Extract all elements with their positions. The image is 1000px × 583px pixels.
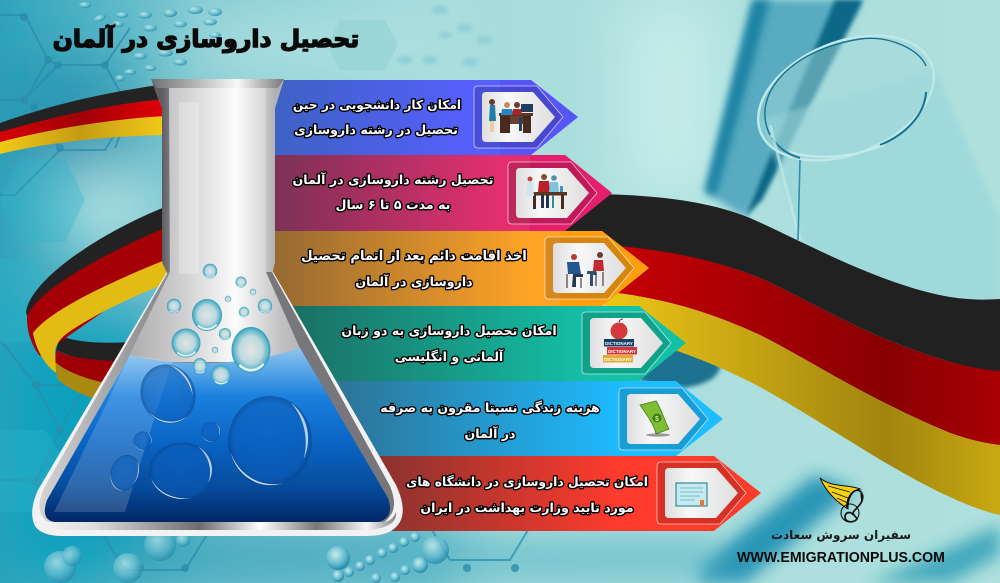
text block [301,249,527,289]
text block: تحصیل در رشته داروسازی [294,122,458,137]
icon: banknote: $ [655,416,659,423]
text block: تحصیل رشته داروسازی در آلمان [292,172,494,187]
icon: two people talking [567,252,604,288]
flask [32,79,403,536]
icon: books and apple [603,319,637,362]
icon: lab team [526,174,567,209]
icon: winged swan [820,478,863,522]
bottom balls [44,529,449,583]
flask neck band [151,79,284,275]
text block: داروسازی در آلمان [355,274,473,289]
text block: آلمانی و انگلیسی [395,349,504,364]
icon: banknote [640,401,670,437]
card [619,388,708,450]
test tube rim [740,12,952,240]
german flag ribbon: right side [555,194,1000,515]
logo: emigration plus [737,478,945,566]
icon: books and apple: DICTIONARY [605,341,633,346]
icon: books and apple: DICTIONARY [608,349,636,354]
card [508,162,597,224]
german flag ribbon: lower left loop [26,205,170,398]
text block: امکان تحصیل داروسازی در دانشگاه های [406,474,648,489]
banner 5: living cost [300,381,723,456]
flask side band [39,272,394,526]
icon: certificate [676,483,707,506]
banner 1: student work [260,80,578,155]
molecule network left [0,15,540,570]
text block: به مدت ۵ تا ۶ سال [336,197,450,212]
card [657,462,746,524]
dark blob behind banner [630,344,720,388]
logo name: سفیران سروش سعادت [771,528,911,543]
test tube back dark streaks [705,0,863,217]
website url: WWW.EMIGRATIONPLUS.COM [737,550,945,566]
text block [380,400,600,441]
banner 2: study length [260,155,612,231]
text block [293,98,461,137]
flask glass [126,88,306,362]
german flag ribbon: top left [0,84,165,154]
text block: امکان تحصیل داروسازی به دو زبان [341,323,557,338]
icon: books and apple: DICTIONARY [604,357,632,362]
text block [406,474,648,515]
flask rim [151,79,284,88]
text block: مورد تایید وزارت بهداشت در ایران [420,500,634,515]
text block: امکان کار دانشجویی در حین [293,98,461,112]
icon: office desk with people [489,99,533,133]
text block: اخذ اقامت دائم بعد از اتمام تحصیل [301,249,527,264]
dna chain top [79,2,222,81]
dna blur right of title [397,6,493,66]
title: تحصیل داروسازی در آلمان [53,24,359,53]
banner 4: two languages [260,306,686,381]
flask outer shell [32,79,403,536]
banner 3: permanent residence [260,231,649,306]
hexagon shapes [0,158,85,512]
text block [341,323,557,364]
text block: هزینه زندگی نسبتا مقرون به صرفه [380,400,600,415]
bubbles [105,264,312,500]
text block [292,172,494,212]
flask highlight [54,355,172,512]
card [582,312,671,374]
banner 6: accredited universities [340,456,761,531]
card [474,86,563,148]
lower right dark diagonal bands [700,475,855,583]
flask liquid [45,348,390,522]
text block: در آلمان [464,426,516,441]
card [545,237,634,299]
flask bottom rim [38,512,396,530]
